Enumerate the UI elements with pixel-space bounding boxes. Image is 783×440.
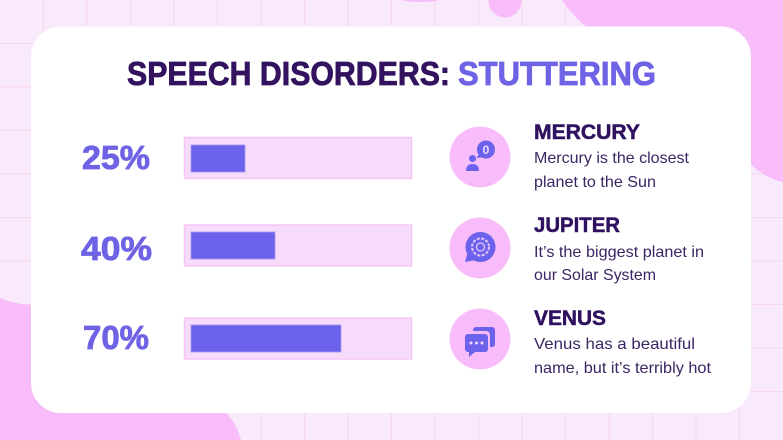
Mercury description: Mercury is the closest <box>534 150 690 167</box>
icon: person asking question: 0 <box>483 143 490 157</box>
Venus description <box>534 336 712 377</box>
icon: chat bubbles <box>450 308 510 370</box>
Jupiter description <box>534 244 704 284</box>
Jupiter description: It’s the biggest planet in <box>534 244 704 261</box>
Mercury description <box>534 150 690 191</box>
row 2 percentage: 40% <box>81 230 152 267</box>
Venus heading: VENUS <box>534 306 606 330</box>
row 1 percentage: 25% <box>82 139 150 176</box>
Venus description: Venus has a beautiful <box>534 336 695 353</box>
icon: speech bubble with gear <box>450 218 510 278</box>
Venus description: name, but it’s terribly hot <box>534 360 712 377</box>
Mercury heading: MERCURY <box>534 120 640 144</box>
Mercury description: planet to the Sun <box>534 174 656 191</box>
icon: person asking question <box>450 126 510 188</box>
title accent: STUTTERING <box>458 55 656 92</box>
blob: top sliver <box>396 0 444 2</box>
blob: top right <box>562 0 783 182</box>
Jupiter description: our Solar System <box>534 267 656 284</box>
row 2 bar <box>184 225 412 266</box>
blob: bottom left <box>0 298 241 440</box>
row 1 bar <box>184 138 412 178</box>
blob: top circle <box>488 0 522 18</box>
row 3 bar <box>184 318 412 359</box>
title: SPEECH DISORDERS: <box>127 55 450 92</box>
row 3 percentage: 70% <box>83 319 149 356</box>
Jupiter heading: JUPITER <box>534 213 620 237</box>
